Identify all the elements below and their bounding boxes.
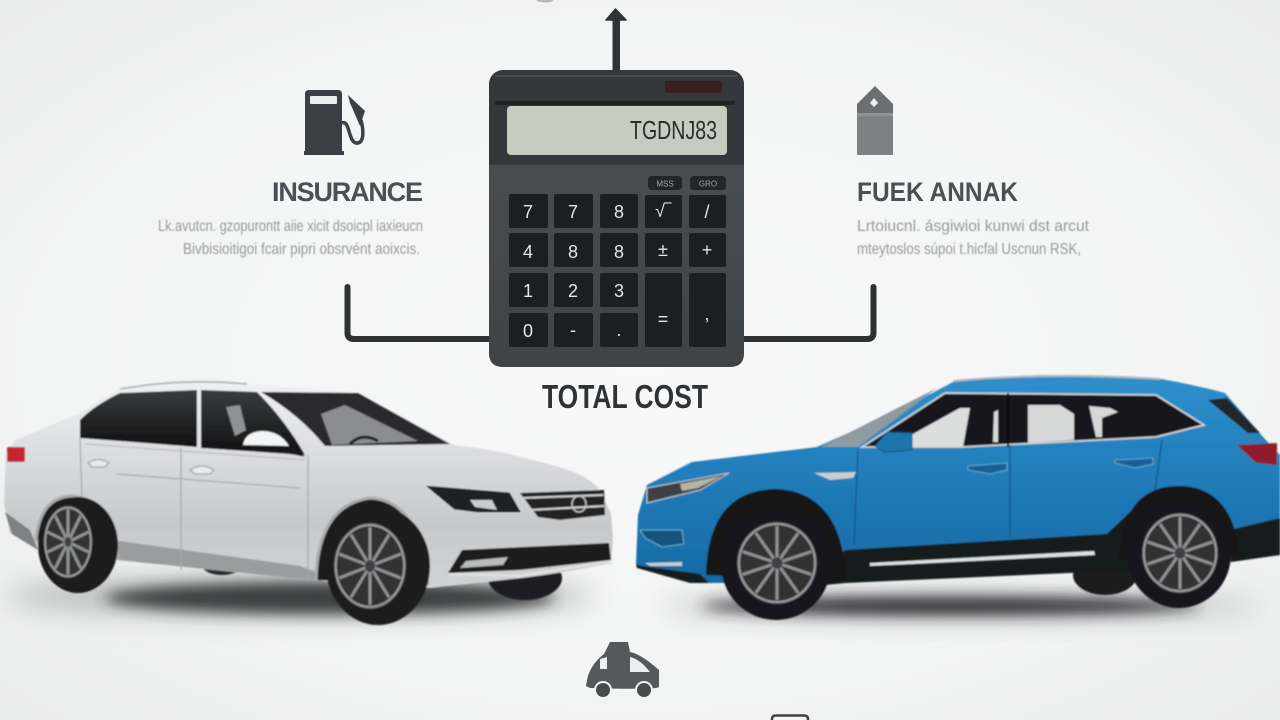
- sedan rear wheel: [38, 497, 118, 593]
- icon: price tag: [857, 86, 893, 155]
- icon: small car: [586, 642, 659, 699]
- panel: left cost text: [158, 177, 423, 258]
- display: [507, 106, 727, 155]
- suv body: [636, 375, 1280, 583]
- text block: insurance description: Lk.avutcn. gzopurontt aiie xicit dsoicpl iaxieucn: [158, 218, 423, 235]
- keypad: 7: [523, 202, 533, 222]
- keypad: √‾: [655, 201, 672, 221]
- suv front wheel: [721, 508, 831, 620]
- icon: cropped lower-right glyph: [772, 716, 808, 720]
- keypad: [509, 176, 726, 347]
- suv rear wheel: [1127, 500, 1231, 608]
- sedan door lines: [80, 438, 308, 578]
- suv door handles: [968, 458, 1153, 474]
- sedan grille: [520, 490, 605, 520]
- bracket connector: right: [742, 287, 874, 339]
- suv windshield: [821, 388, 937, 447]
- keypad: /: [704, 202, 710, 222]
- keypad: 8: [614, 202, 624, 222]
- keypad: 3: [614, 281, 624, 301]
- solar panel: [665, 81, 722, 93]
- heading: fuel annual: FUEK ANNAK: [857, 177, 1018, 207]
- keypad: +: [702, 240, 712, 260]
- keypad: -: [570, 320, 576, 340]
- suv far wheel: [1073, 555, 1137, 595]
- sedan headlight: [424, 485, 522, 513]
- shadow: sedan: [5, 576, 595, 616]
- suv lower cladding: [825, 512, 1130, 585]
- sedan body: [4, 379, 613, 588]
- suv roof rail: [953, 376, 1160, 381]
- suv door lines: [854, 440, 1162, 545]
- text block: fuel description: [857, 218, 1090, 258]
- keypad: ±: [658, 240, 668, 260]
- roof rail: [120, 382, 247, 389]
- suv mirror: [875, 432, 912, 452]
- suv headlight: [647, 473, 729, 503]
- calculator: [489, 70, 744, 367]
- calculator body: [489, 70, 744, 367]
- keypad: MSS: [656, 180, 674, 188]
- far side wheel: [488, 556, 562, 600]
- keypad: 7: [568, 202, 578, 222]
- bracket connector: left: [348, 287, 492, 339]
- keypad: 4: [523, 242, 533, 262]
- keypad: 8: [568, 242, 578, 262]
- suv tail light: [1237, 443, 1277, 465]
- car: blue suv: [636, 375, 1280, 620]
- sedan rear lower trim: [5, 512, 38, 550]
- label: total cost: TOTAL COST: [542, 378, 708, 415]
- suv windows: [862, 393, 1204, 447]
- keypad: ,: [704, 304, 710, 324]
- text block: insurance description: [158, 218, 423, 258]
- keypad: .: [616, 320, 622, 340]
- suv fender vent: [814, 472, 856, 480]
- sedan front wheel: [326, 507, 430, 625]
- sedan lower intake: [448, 543, 611, 573]
- arrow: up from calculator: [606, 9, 626, 72]
- sedan windows: [80, 390, 450, 455]
- top edge mark: [537, 0, 553, 2]
- sedan mirror: [243, 431, 305, 457]
- icon: fuel pump: [304, 90, 365, 155]
- keypad: =: [658, 309, 668, 329]
- keypad: 0: [523, 321, 533, 341]
- keypad: 2: [568, 281, 578, 301]
- keypad: 1: [523, 281, 533, 301]
- panel: right cost text: [857, 177, 1090, 258]
- sedan tail light: [7, 447, 25, 462]
- car: silver sedan: [4, 379, 613, 625]
- shadow: suv: [660, 594, 1260, 618]
- keypad: 8: [614, 242, 624, 262]
- keypad: GRO: [699, 180, 717, 188]
- sedan wheel arches: [316, 498, 428, 585]
- text block: fuel description: mteytoslos súpoi t.hicfal Uscnun RSK,: [857, 241, 1081, 258]
- suv wheel arches: [706, 489, 846, 580]
- display: TGDNJ83: [630, 115, 717, 145]
- suv front grille: [640, 530, 684, 547]
- sedan door handles: [88, 460, 214, 474]
- text block: insurance description: Bivbisioitigoi fcair pipri obsrvént aoixcis.: [183, 241, 420, 258]
- suv chrome strip: [870, 551, 1095, 566]
- suv rear quarter window: [1208, 398, 1260, 433]
- heading: insurance: INSURANCE: [272, 177, 423, 207]
- text block: fuel description: Lrtoiucnl. ásgiwioi kunwi dst arcut: [857, 218, 1090, 235]
